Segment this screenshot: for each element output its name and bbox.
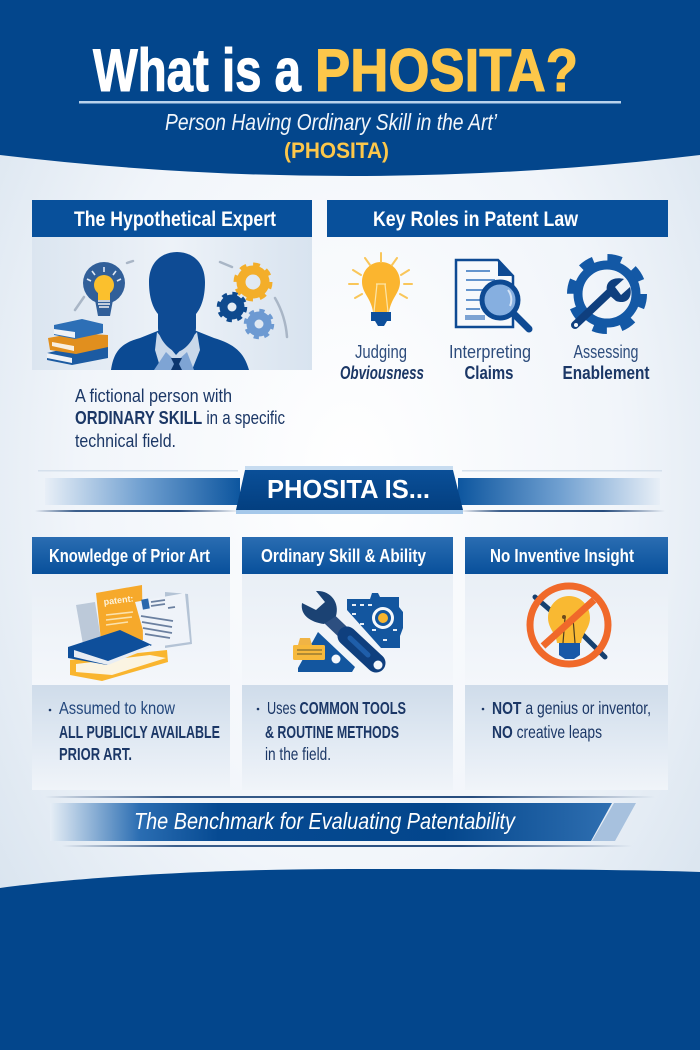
text: ordinary skill [257, 698, 406, 764]
heading: key roles [327, 200, 668, 237]
icon: gear with wrench [571, 258, 643, 330]
subtitle abbreviation: (PHOSITA) [284, 138, 389, 163]
text: ordinary skill: & ROUTINE METHODS [265, 722, 399, 742]
text: definition: ORDINARY SKILL in a specific [75, 408, 285, 428]
heading: the hypothetical expert: The Hypothetical Expert [74, 208, 276, 231]
icon: expert silhouette [111, 252, 249, 370]
title: What is a [93, 37, 301, 104]
icon: patents and books: patent: [103, 593, 134, 607]
banner: phosita is: PHOSITA IS... [267, 474, 430, 504]
icon: document with magnifier [456, 260, 529, 329]
banner: phosita is [35, 466, 665, 514]
icon: patents and books [68, 585, 192, 681]
heading: the hypothetical expert [32, 200, 312, 237]
text: definition: A fictional person with [75, 386, 232, 406]
text: no inventive insight: NOT a genius or inventor, [492, 698, 651, 718]
labels: interpreting claims: Interpreting [449, 342, 531, 362]
panel: the hypothetical expert [32, 200, 312, 451]
labels: judging obviousness: Obviousness [340, 363, 424, 383]
heading: ordinary skill [242, 537, 453, 574]
heading: knowledge of prior art: Knowledge of Prior Art [49, 546, 210, 566]
panel: key roles in patent law [327, 200, 668, 383]
footer band [0, 869, 700, 1050]
icon: book stack [47, 319, 108, 365]
icon: lightbulb [349, 253, 412, 326]
labels: judging obviousness: Judging [355, 342, 407, 362]
panel: knowledge of prior art [32, 537, 230, 790]
labels: judging obviousness [340, 342, 424, 383]
heading: knowledge of prior art [32, 537, 230, 574]
subtitle: Person Having Ordinary Skill in the Art’ [165, 109, 498, 135]
heading: no inventive insight: No Inventive Insight [490, 546, 634, 566]
icon: crossed out lightbulb [530, 586, 608, 664]
panel: no inventive insight [465, 537, 668, 790]
decorative arcs [75, 261, 287, 337]
labels: interpreting claims [449, 342, 531, 383]
text: definition: technical field. [75, 431, 176, 451]
text: prior art: PRIOR ART. [59, 744, 132, 764]
text: ordinary skill: Uses COMMON TOOLS [267, 698, 406, 718]
heading: no inventive insight [465, 537, 668, 574]
heading: key roles: Key Roles in Patent Law [373, 208, 579, 231]
icon: gears [219, 265, 272, 337]
banner: benchmark: The Benchmark for Evaluating Patentability [134, 808, 516, 834]
labels: assessing enablement: Assessing [574, 342, 638, 362]
labels: assessing enablement [562, 342, 650, 383]
title: PHOSITA? [315, 37, 578, 104]
text: prior art: ALL PUBLICLY AVAILABLE [59, 722, 220, 742]
text: no inventive insight: NO creative leaps [492, 722, 602, 742]
text: prior art [49, 698, 220, 764]
labels: interpreting claims: Claims [464, 363, 514, 383]
banner: benchmark [45, 796, 655, 847]
text: definition [75, 386, 285, 451]
icon: lightbulb in circle [83, 262, 125, 316]
top header band [0, 0, 700, 176]
title [93, 37, 578, 104]
text: no inventive insight [482, 698, 651, 742]
icon: wrench and circuit [293, 591, 403, 672]
text: prior art: Assumed to know [59, 698, 175, 718]
heading: ordinary skill: Ordinary Skill & Ability [261, 546, 426, 566]
labels: assessing enablement: Enablement [562, 363, 650, 383]
panel: ordinary skill and ability [242, 537, 453, 790]
text: ordinary skill: in the field. [265, 744, 331, 764]
